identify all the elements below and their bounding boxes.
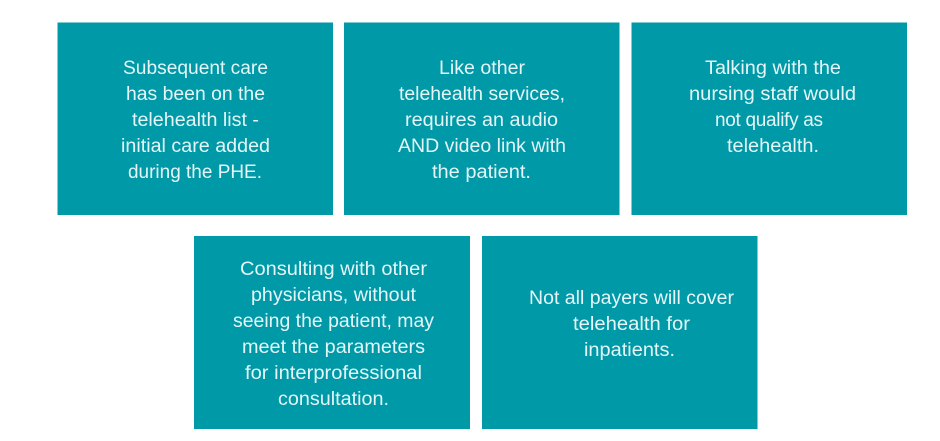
text: consulting with physicians: consultation. [278, 389, 389, 410]
text: subsequent care [121, 58, 270, 183]
text: audio and video link: the patient. [432, 162, 531, 183]
text: consulting with physicians: for interprofessional [245, 363, 422, 384]
text: nursing staff: Talking with the [705, 58, 841, 79]
text: audio and video link: requires an audio [405, 110, 558, 131]
text: consulting with physicians [233, 259, 434, 410]
text: nursing staff: not qualify as [715, 110, 823, 131]
text: consulting with physicians: Consulting with other [240, 259, 428, 280]
text: audio and video link: AND video link with [398, 136, 566, 157]
panel: nursing staff [632, 22, 907, 215]
text: consulting with physicians: seeing the patient, may [233, 311, 434, 332]
panel: subsequent care [58, 22, 333, 215]
panel: audio and video link [344, 22, 620, 215]
text: subsequent care: telehealth list - [132, 110, 259, 131]
text: subsequent care: initial care added [121, 136, 270, 157]
text: subsequent care: Subsequent care [123, 58, 268, 79]
text: subsequent care: has been on the [126, 84, 265, 105]
text: audio and video link [398, 58, 566, 183]
text: consulting with physicians: physicians, without [251, 285, 417, 306]
text: payers coverage: Not all payers will cover [529, 288, 735, 309]
panel: consulting with physicians [194, 236, 470, 429]
text: payers coverage [529, 288, 735, 361]
panel: payers coverage [482, 236, 758, 429]
text: nursing staff: telehealth. [727, 136, 819, 157]
text: audio and video link: Like other [439, 58, 526, 79]
text: subsequent care: during the PHE. [128, 162, 262, 183]
text: nursing staff [689, 58, 856, 157]
text: nursing staff: nursing staff would [689, 84, 856, 105]
text: payers coverage: telehealth for [573, 314, 691, 335]
text: consulting with physicians: meet the parameters [242, 337, 425, 358]
text: payers coverage: inpatients. [584, 340, 675, 361]
text: audio and video link: telehealth services, [399, 84, 565, 105]
